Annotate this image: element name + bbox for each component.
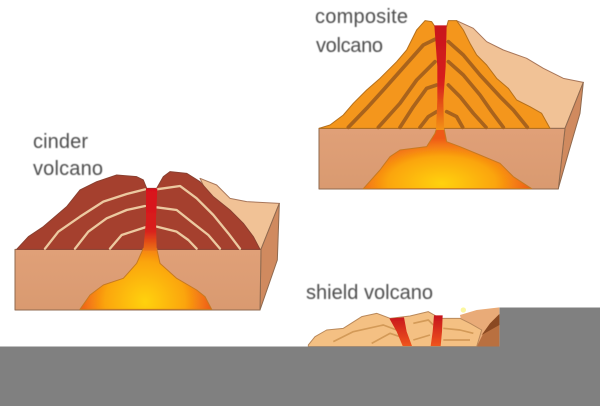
composite volcano label: [315, 6, 408, 57]
gray bar: right: [500, 308, 600, 348]
composite lava layers: [348, 39, 527, 127]
shield vent left: [389, 317, 412, 346]
composite magma chamber: [363, 128, 532, 189]
cinder volcano label: volcano: [33, 158, 103, 180]
cinder volcano label: cinder: [33, 131, 88, 153]
shield block side: [477, 315, 499, 347]
cinder back slope: [200, 178, 279, 249]
shield highlight: [461, 307, 466, 313]
shield cone: [308, 312, 482, 347]
shield lava layers: [333, 320, 473, 343]
composite volcano label: composite: [315, 6, 408, 28]
gray bar: bottom: [0, 346, 600, 406]
shield volcano diagram: [308, 307, 499, 347]
shield dark edge: [482, 314, 499, 335]
composite block right side: [558, 82, 583, 188]
composite block front: [319, 128, 565, 189]
cinder cone: [17, 172, 260, 249]
composite cone: [319, 21, 550, 128]
shield volcano label: shield volcano: [306, 282, 433, 304]
composite conduit: [434, 25, 447, 130]
composite back slope: [457, 21, 583, 128]
cinder magma chamber: [80, 248, 212, 309]
composite volcano diagram: [319, 21, 583, 189]
cinder volcano diagram: [15, 172, 279, 310]
composite volcano label: volcano: [316, 35, 383, 57]
cinder volcano label: [33, 131, 103, 180]
cinder block right side: [260, 203, 279, 310]
shield back slope: [460, 307, 499, 347]
cinder ash layers: [45, 186, 240, 249]
cinder block front: [15, 249, 261, 310]
shield vent right: [431, 315, 443, 346]
cinder conduit: [143, 188, 157, 251]
